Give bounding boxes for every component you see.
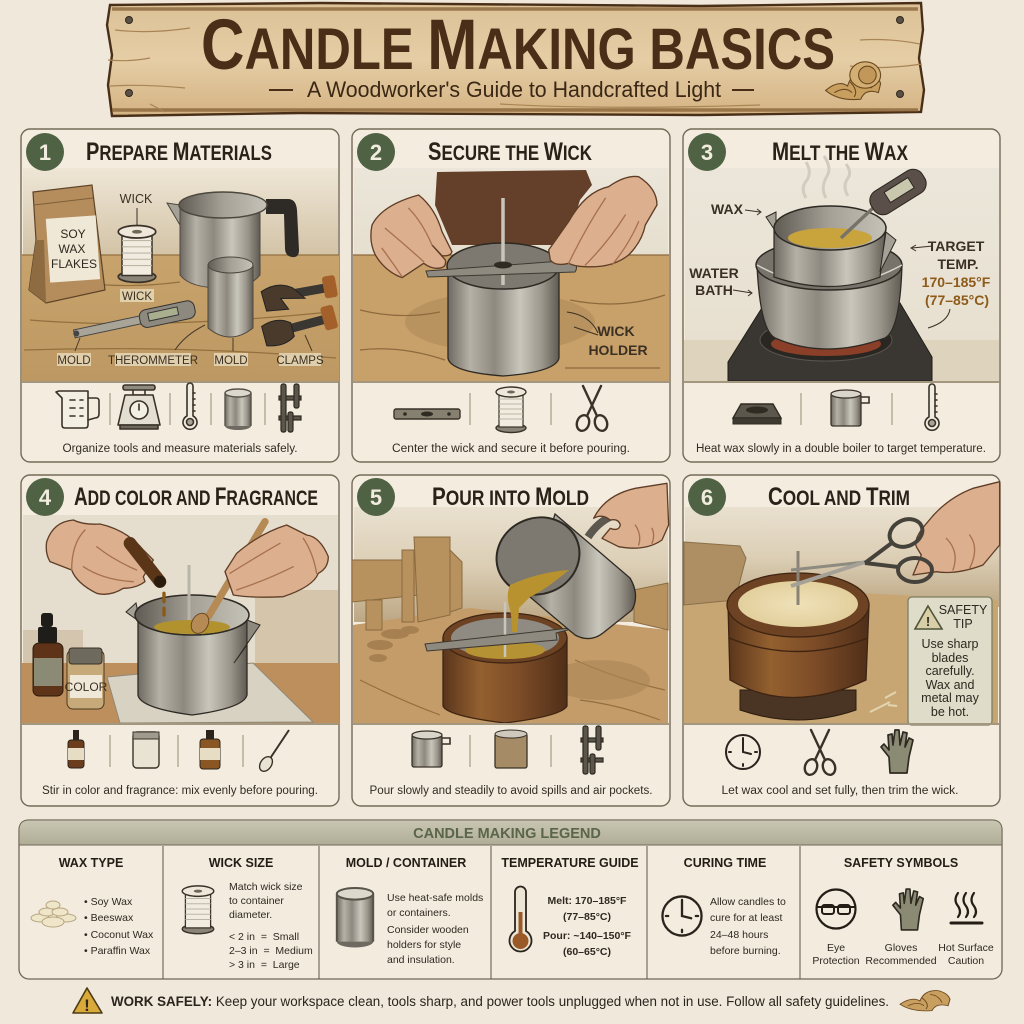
step number xyxy=(357,133,395,171)
probe thermometer xyxy=(841,165,930,238)
target temperature: 170–185°F xyxy=(922,274,991,290)
step number: 2 xyxy=(370,140,382,165)
wick xyxy=(501,198,505,285)
panel 4: add color and fragrance xyxy=(21,475,339,806)
wick size: to container xyxy=(229,895,284,907)
mold or container: and insulation. xyxy=(387,954,455,966)
wax type: • Paraffin Wax xyxy=(84,945,151,957)
cloth xyxy=(107,663,313,723)
safety message: WORK SAFELY: Keep your workspace clean, tools sharp, and power tools unplugged when not in use. Follow all safety guidelines. xyxy=(111,994,889,1009)
panel 2: secure the wick xyxy=(352,129,670,462)
step number xyxy=(688,478,726,516)
temperature guide: (60–65°C) xyxy=(563,946,611,958)
curing time: 24–48 hours xyxy=(710,929,768,941)
scissors xyxy=(791,514,932,586)
mold or container: Consider wooden xyxy=(387,924,469,936)
safety tip callout: carefully. xyxy=(925,664,975,678)
wick size: WICK SIZE xyxy=(209,856,273,870)
wick size xyxy=(182,856,313,971)
curing time: Allow candles to xyxy=(710,896,786,908)
safety symbols: Recommended xyxy=(865,955,937,967)
pouring pitcher xyxy=(167,192,299,288)
spent wick scraps xyxy=(870,692,897,712)
apron xyxy=(435,170,592,245)
scene: trimming the wick xyxy=(684,482,1000,725)
part labels: CLAMPS xyxy=(276,355,324,367)
wood shavings on floor xyxy=(367,626,419,662)
wax bag: FLAKES xyxy=(51,257,97,271)
icon row xyxy=(353,381,669,432)
temperature guide: (77–85°C) xyxy=(563,911,611,923)
safety symbols: Eye xyxy=(827,942,845,954)
caption: Organize tools and measure materials safely. xyxy=(62,443,298,455)
heading: PREPARE MATERIALS xyxy=(86,138,272,166)
temperature guide: Melt: 170–185°F xyxy=(548,895,627,907)
left hand xyxy=(371,195,452,278)
stove xyxy=(728,303,932,381)
wax type: • Soy Wax xyxy=(84,896,133,908)
color jar: COLOR xyxy=(65,680,108,694)
scene: double boiler xyxy=(684,156,999,381)
icon: wood shavings xyxy=(826,62,881,100)
target temperature: (77–85°C) xyxy=(925,292,989,308)
wood candle holder xyxy=(727,573,869,720)
wick size: Match wick size xyxy=(229,881,303,893)
left hand with dropper bottle xyxy=(46,520,166,615)
panel 6: cool and trim xyxy=(683,475,1000,806)
safety tip callout: metal may xyxy=(921,691,980,705)
workshop bench and planks xyxy=(352,537,668,630)
heading: COOL AND TRIM xyxy=(768,483,910,511)
clamps xyxy=(260,275,339,348)
title text: CANDLE MAKING BASICS xyxy=(201,6,835,85)
mold or container xyxy=(337,856,483,966)
labels xyxy=(689,201,761,298)
panel 5: pour into mold xyxy=(352,475,670,806)
icon: warning triangle xyxy=(73,988,102,1015)
label: wick holder xyxy=(567,312,648,358)
curing time: CURING TIME xyxy=(684,856,766,870)
legend header xyxy=(19,820,1002,845)
right hand xyxy=(549,176,657,267)
label: wick lower: WICK xyxy=(122,291,152,303)
title banner xyxy=(107,3,924,116)
icon row xyxy=(684,381,999,430)
safety tip callout: SAFETY xyxy=(939,603,988,617)
curing time: cure for at least xyxy=(710,912,782,924)
mold or container: holders for style xyxy=(387,939,461,951)
spool of wick xyxy=(118,226,156,282)
subtitle: A Woodworker's Guide to Handcrafted Light xyxy=(307,77,721,102)
wick holder xyxy=(425,627,579,651)
scene: pouring wax xyxy=(352,483,669,724)
temperature guide: Pour: ~140–150°F xyxy=(543,930,632,942)
icon row xyxy=(684,723,999,776)
heading: POUR INTO MOLD xyxy=(432,483,589,511)
wax type xyxy=(31,856,154,957)
wooden spoon xyxy=(188,522,265,637)
scene: stirring in color xyxy=(22,515,339,724)
wax type: • Beeswax xyxy=(84,912,134,924)
wax stream xyxy=(508,570,569,632)
pot xyxy=(126,595,260,715)
panel 1: prepare materials xyxy=(21,129,339,462)
scene: materials on workbench xyxy=(22,168,339,381)
curing time xyxy=(662,856,786,957)
tilted pitcher xyxy=(485,505,636,639)
label: wick holder: WICK xyxy=(597,323,635,339)
safety symbols: Caution xyxy=(948,955,984,967)
safety tip callout: be hot. xyxy=(931,705,969,719)
heading: ADD COLOR AND FRAGRANCE xyxy=(74,483,318,511)
safety tip callout: ! xyxy=(926,614,930,629)
upper pot with wax xyxy=(766,206,896,286)
icon row xyxy=(22,723,338,774)
safety tip callout: blades xyxy=(932,651,968,665)
target temperature: TEMP. xyxy=(938,256,978,272)
wick in pot xyxy=(188,565,190,620)
labels: BATH xyxy=(695,282,733,298)
footer safety note xyxy=(73,988,950,1015)
icon row xyxy=(353,723,669,774)
legend panel xyxy=(19,820,1002,979)
part labels: MOLD xyxy=(214,355,248,367)
label: wick holder: HOLDER xyxy=(588,342,648,358)
step number: 3 xyxy=(701,140,713,165)
legend header: CANDLE MAKING LEGEND xyxy=(413,826,601,842)
target temperature: TARGET xyxy=(928,238,985,254)
step number xyxy=(357,478,395,516)
wick holder bar xyxy=(426,260,576,277)
steam xyxy=(803,156,850,198)
caption: Center the wick and secure it before pouring. xyxy=(392,443,630,455)
metal mold xyxy=(208,257,253,337)
step number: 6 xyxy=(701,485,713,510)
scene: centering wick xyxy=(353,168,669,381)
temperature guide xyxy=(501,856,639,958)
wick xyxy=(504,602,506,657)
color jar xyxy=(65,648,108,709)
safety tip callout: Wax and xyxy=(926,678,974,692)
mold or container: or containers. xyxy=(387,907,451,919)
wick xyxy=(796,551,800,605)
caption: Let wax cool and set fully, then trim the wick. xyxy=(722,785,958,797)
caption: Pour slowly and steadily to avoid spills and air pockets. xyxy=(370,785,652,797)
hand xyxy=(913,482,1000,575)
wick size: < 2 in = Small xyxy=(229,931,299,943)
temperature guide: TEMPERATURE GUIDE xyxy=(501,856,639,870)
wax type: WAX TYPE xyxy=(59,856,123,870)
workbench xyxy=(684,542,746,605)
safety symbols: SAFETY SYMBOLS xyxy=(844,856,958,870)
target temperature xyxy=(911,238,991,328)
right hand xyxy=(225,525,328,597)
wax bag: SOY xyxy=(60,227,86,241)
safety tip callout: TIP xyxy=(953,617,973,631)
mold xyxy=(447,243,559,376)
icon: wood shavings xyxy=(900,991,950,1011)
step number: 1 xyxy=(39,140,51,165)
icon: warning triangle: ! xyxy=(84,996,90,1015)
panel 3: melt the wax xyxy=(683,129,1000,462)
step number: 5 xyxy=(370,485,382,510)
wick size: > 3 in = Large xyxy=(229,959,300,971)
icon row xyxy=(22,381,338,432)
safety symbols: Protection xyxy=(812,955,860,967)
safety symbols: Gloves xyxy=(885,942,917,954)
wick size: diameter. xyxy=(229,909,272,921)
step number: 4 xyxy=(39,485,52,510)
heading: SECURE THE WICK xyxy=(428,138,592,166)
wax bag xyxy=(29,185,105,303)
step number xyxy=(26,133,64,171)
wick size: 2–3 in = Medium xyxy=(229,945,313,957)
curing time: before burning. xyxy=(710,945,781,957)
labels: WATER xyxy=(689,265,739,281)
caption: Heat wax slowly in a double boiler to target temperature. xyxy=(696,443,986,455)
mold or container: MOLD / CONTAINER xyxy=(346,856,466,870)
mold or container: Use heat-safe molds xyxy=(387,892,483,904)
wax bag: WAX xyxy=(59,242,85,256)
safety tip callout: Use sharp xyxy=(922,637,979,651)
digital thermometer xyxy=(72,300,197,343)
pitcher handle xyxy=(588,516,612,537)
fragrance bottle xyxy=(33,613,63,696)
part labels: MOLD xyxy=(57,355,91,367)
labels: WAX xyxy=(711,201,744,217)
wood stump holder xyxy=(443,613,567,723)
heading: MELT THE WAX xyxy=(772,138,908,166)
part labels: THEROMMETER xyxy=(108,355,198,367)
caption: Stir in color and fragrance: mix evenly before pouring. xyxy=(42,785,318,797)
hand xyxy=(594,483,669,548)
step number xyxy=(688,133,726,171)
lower pot xyxy=(756,240,902,349)
part labels xyxy=(57,325,324,367)
label: wick: WICK xyxy=(120,192,153,206)
safety symbols xyxy=(812,856,994,967)
safety symbols: Hot Surface xyxy=(938,942,994,954)
step number xyxy=(26,478,64,516)
wax type: • Coconut Wax xyxy=(84,929,154,941)
safety tip callout xyxy=(908,597,992,725)
